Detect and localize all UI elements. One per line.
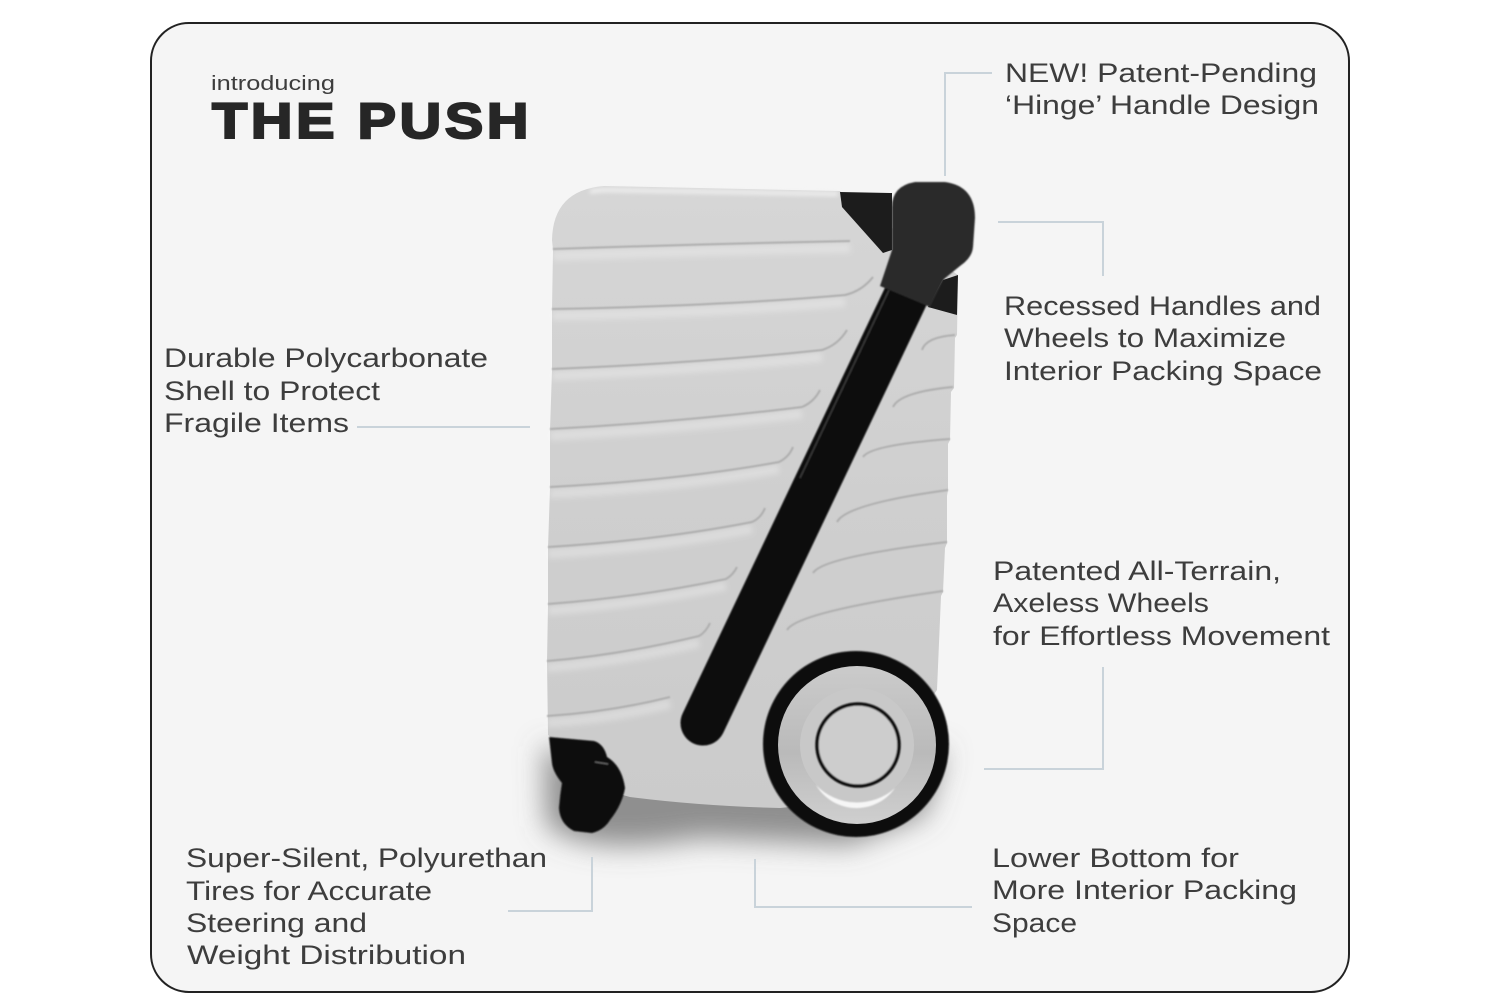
callout: hinge handle: ‘Hinge’ Handle Design [1005, 90, 1319, 120]
panel: card background [151, 23, 1349, 992]
leader line: lower bottom [755, 859, 972, 907]
heading: introducing The Push: THE PUSH [212, 93, 532, 149]
leader line: polycarbonate shell [357, 426, 530, 428]
handle lower wedge [928, 275, 958, 315]
leader line: axeless wheels [984, 667, 1103, 769]
heading: introducing The Push [211, 73, 532, 149]
callout: recessed handles [1004, 291, 1322, 386]
top edge highlight [590, 190, 838, 194]
suitcase body [547, 186, 958, 808]
leader line: hinge handle [945, 73, 992, 176]
callout: hinge handle [1005, 58, 1319, 120]
callout: axeless wheels: Patented All-Terrain, [993, 556, 1281, 586]
panel sheen [547, 248, 850, 723]
leader line: polyurethane tires [508, 857, 592, 911]
callout: polycarbonate shell: Durable Polycarbonate [164, 343, 488, 373]
illustration: suitcase [544, 182, 975, 846]
large axeless wheel [763, 651, 949, 837]
callout: recessed handles: Wheels to Maximize [1004, 323, 1286, 353]
callout: lower bottom: Lower Bottom for [992, 843, 1239, 873]
handle hinge cap [880, 182, 975, 307]
callout: axeless wheels: for Effortless Movement [993, 621, 1331, 651]
heading: introducing The Push: introducing [211, 73, 335, 95]
callout: polycarbonate shell: Fragile Items [164, 408, 349, 438]
callout: axeless wheels [993, 556, 1331, 651]
telescoping handle bar [703, 290, 905, 723]
callout: polyurethane tires: Super-Silent, Polyurethan [186, 843, 547, 873]
callout: polyurethane tires: Steering and [186, 908, 367, 938]
callout: recessed handles: Recessed Handles and [1004, 291, 1321, 321]
handle hinge corner wedge [840, 192, 892, 253]
callout: hinge handle: NEW! Patent-Pending [1005, 58, 1317, 88]
callout: recessed handles: Interior Packing Space [1004, 356, 1322, 386]
callout: axeless wheels: Axeless Wheels [993, 588, 1209, 618]
callout: polyurethane tires [186, 843, 547, 970]
callout: polycarbonate shell: Shell to Protect [164, 376, 381, 406]
leader line: recessed handles [998, 222, 1103, 276]
callout: polycarbonate shell [164, 343, 488, 438]
callout: lower bottom [992, 843, 1297, 938]
callout: lower bottom: Space [992, 908, 1077, 938]
spinner caster [549, 737, 625, 833]
suitcase shadow [544, 745, 945, 846]
callout: polyurethane tires: Weight Distribution [187, 940, 466, 970]
callout: polyurethane tires: Tires for Accurate [186, 876, 432, 906]
callout: lower bottom: More Interior Packing [992, 875, 1297, 905]
shell ridges [547, 241, 955, 716]
